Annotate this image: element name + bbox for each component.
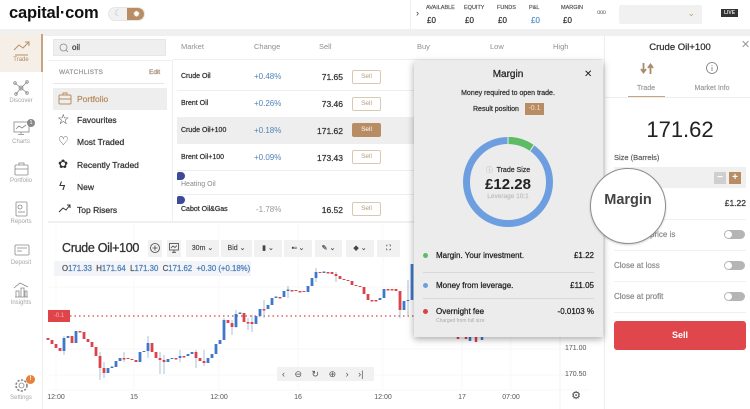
new row: ϟ <box>59 179 65 193</box>
margin popup <box>414 61 603 337</box>
position badge: -0.1 <box>528 105 541 112</box>
reports item: Reports <box>10 219 32 225</box>
margin value: £1.22 <box>725 198 746 208</box>
minus button <box>714 172 726 184</box>
row: Cabot Oil&Gas: 16.52 <box>322 205 343 215</box>
icon: trade <box>14 42 30 56</box>
magnified word: Margin <box>604 192 652 208</box>
candles below popup <box>470 337 482 341</box>
row: Crude Oil: Crude Oil <box>181 73 211 80</box>
layers button: ◆ ⌄ <box>353 245 367 252</box>
draw button <box>315 240 342 257</box>
market info tab <box>694 62 730 92</box>
settings item: Settings <box>10 395 32 401</box>
reports item <box>10 202 32 225</box>
insights item: Insights <box>11 300 31 306</box>
row: Heating Oil <box>177 171 537 195</box>
column headers: Market <box>181 42 204 51</box>
row: Brent Oil+100: +0.09% <box>254 153 281 162</box>
row: close at loss <box>614 251 746 282</box>
indicators button <box>284 240 312 257</box>
bid button <box>221 240 252 257</box>
account summary: FUNDS <box>497 5 516 11</box>
account dropdown <box>619 5 702 24</box>
time axis labels: ⚙ <box>571 390 581 402</box>
row: Heating Oil: Heating Oil <box>181 181 216 188</box>
row: Brent Oil <box>177 91 537 118</box>
column headers <box>173 36 604 60</box>
draw button: ✎ ⌄ <box>322 245 335 252</box>
magnifier callout <box>590 168 666 244</box>
popup close: ✕ <box>584 69 592 80</box>
new row <box>59 179 94 193</box>
position label <box>48 310 70 322</box>
market panel <box>48 36 604 223</box>
price: 171.62 <box>646 117 714 142</box>
panel title: Crude Oil+100 <box>649 42 711 53</box>
search box <box>53 39 166 56</box>
fullscreen button: ⛶ <box>386 245 391 252</box>
size label: Size (Barrels) <box>614 153 659 162</box>
chart navigation: ‹ ⊖ ↻ ⊕ › ›| <box>282 369 363 379</box>
price axis labels: 170.50 <box>565 371 586 378</box>
account summary: £0 <box>498 16 507 25</box>
plus button: + <box>732 172 738 183</box>
candle type button: ▮ ⌄ <box>262 245 274 252</box>
toggle sun <box>127 7 146 21</box>
row: Brent Oil+100 <box>177 144 537 171</box>
bid button: Bid ⌄ <box>228 245 245 252</box>
chart toolbar <box>148 240 181 257</box>
most traded row: Most Traded <box>77 137 124 147</box>
discover item: Discover <box>9 98 33 104</box>
row: close at profit: Close at profit <box>614 292 663 301</box>
donut chart <box>463 137 553 227</box>
legend: margin: Margin. Your investment. <box>436 251 524 260</box>
timeframe button: 30m ⌄ <box>192 245 213 252</box>
column headers: Change <box>254 42 280 51</box>
row: Crude Oil+100 selected: +0.18% <box>254 126 281 135</box>
account summary: £0 <box>465 16 474 25</box>
position label: -0.1 <box>54 313 64 319</box>
popup title: Margin <box>493 69 523 80</box>
legend divider two <box>423 298 594 299</box>
time axis labels: 12:00 <box>374 394 392 401</box>
position badge <box>525 103 544 115</box>
account summary <box>410 0 610 29</box>
settings item: ! <box>30 376 32 382</box>
account summary: › <box>416 8 419 18</box>
trade tab: Trade <box>637 85 655 92</box>
row: Cabot Oil&Gas: Cabot Oil&Gas <box>181 206 228 213</box>
legend: overnight fee: Overnight fee <box>436 307 484 316</box>
trade size value: £12.28 <box>485 176 531 193</box>
price axis labels: 171.00 <box>565 345 586 352</box>
close icon: ✕ <box>741 39 750 51</box>
chart panel <box>48 224 604 409</box>
row: price is: price is <box>650 230 675 239</box>
time axis labels: 16 <box>294 394 302 401</box>
legend: overnight fee: Charged from full size <box>436 318 485 324</box>
chart title: Crude Oil+100 <box>62 241 139 255</box>
recently traded row: Recently Traded <box>77 160 139 170</box>
charts item: 1 <box>29 120 33 126</box>
favourites row <box>57 111 117 127</box>
favourites row: Favourites <box>77 115 117 125</box>
row: Crude Oil+100 selected: 171.62 <box>317 126 343 136</box>
edit link: Edit <box>149 69 160 76</box>
discover item <box>9 80 33 104</box>
sell button: Sell <box>672 330 688 340</box>
most traded row: ♡ <box>58 134 69 148</box>
most traded row <box>58 134 124 148</box>
button: add <box>148 240 162 257</box>
trade size label: ⓘ Trade Size <box>486 167 530 174</box>
row: Brent Oil: Brent Oil <box>181 100 208 107</box>
timeframe button <box>186 240 219 257</box>
legend: margin <box>423 251 594 260</box>
legend: leverage: Money from leverage. <box>436 281 513 290</box>
result position: Result position <box>473 106 519 113</box>
row: Crude Oil+100 selected: Crude Oil+100 <box>181 127 226 134</box>
row: Crude Oil: 71.65 <box>322 72 343 82</box>
deposit item <box>11 244 32 266</box>
portfolio item: Portfolio <box>10 178 32 184</box>
row: Brent Oil: +0.26% <box>254 99 281 108</box>
deposit item: Deposit <box>11 260 31 266</box>
live badge <box>721 9 738 17</box>
fullscreen button <box>377 240 400 257</box>
favourites row: ☆ <box>57 111 70 127</box>
row: Brent Oil+100: 173.43 <box>317 153 343 163</box>
time axis labels: 07:00 <box>502 394 520 401</box>
new row: New <box>77 182 94 192</box>
account dropdown: ⌄ <box>687 8 695 18</box>
legend: leverage: £11.05 <box>570 281 594 290</box>
row: Crude Oil+100 selected <box>177 117 537 144</box>
account summary: EQUITY <box>464 5 484 11</box>
column headers: Sell <box>319 42 332 51</box>
indicators button: ▪▫ ⌄ <box>292 245 304 252</box>
watchlists column <box>48 60 173 223</box>
settings item <box>10 375 35 401</box>
trade tab <box>628 60 665 97</box>
row: Brent Oil: Sell <box>361 100 372 107</box>
toggle sun: ✹ <box>133 9 140 19</box>
legend: overnight fee: -0.0103 % <box>558 307 594 316</box>
time axis labels: 15 <box>130 394 138 401</box>
watchlists underline <box>53 83 164 84</box>
account summary: £0 <box>531 16 540 25</box>
toggle moon: ☾ <box>114 8 122 18</box>
sell button <box>614 321 746 350</box>
icon: trade arrows <box>640 63 654 74</box>
row: Cabot Oil&Gas: -1.78% <box>256 205 281 214</box>
row: Cabot Oil&Gas <box>177 196 381 216</box>
column headers: Buy <box>417 42 430 51</box>
account summary: £0 <box>563 16 572 25</box>
logo: capital·com <box>9 4 98 22</box>
account summary: AVAILABLE <box>426 5 455 11</box>
live badge: LIVE <box>724 10 735 16</box>
red candles <box>48 272 400 373</box>
row: Crude Oil: Sell <box>361 73 372 80</box>
plus button <box>729 172 741 184</box>
row: Brent Oil+100: Brent Oil+100 <box>181 154 224 161</box>
account summary: P&L <box>529 5 539 11</box>
leverage: Leverage 10:1 <box>487 193 529 200</box>
time axis labels: 17 <box>458 394 466 401</box>
time axis labels <box>47 390 581 402</box>
chart navigation <box>277 367 374 381</box>
market info tab: Market Info <box>694 85 730 92</box>
layers button <box>346 240 374 257</box>
portfolio row <box>53 88 167 110</box>
trade label: Trade <box>13 57 29 63</box>
column headers: Low <box>490 42 504 51</box>
time axis labels: 12:00 <box>210 394 228 401</box>
row: close at profit <box>614 282 746 313</box>
size input <box>614 167 746 188</box>
portfolio item <box>10 162 32 184</box>
tab divider <box>605 97 750 98</box>
charts item <box>12 119 35 145</box>
legend: leverage <box>423 281 594 290</box>
minus button: − <box>717 172 723 183</box>
legend divider one <box>423 272 594 273</box>
row: Brent Oil: 73.46 <box>322 99 343 109</box>
markets rows <box>177 70 414 216</box>
row: Cabot Oil&Gas: Sell <box>361 205 372 212</box>
account summary: £0 <box>427 16 436 25</box>
watchlists heading: WATCHLISTS <box>59 69 103 76</box>
row: Crude Oil <box>177 61 537 91</box>
top risers row: Top Risers <box>77 205 117 215</box>
row: Brent Oil+100: Sell <box>361 153 372 160</box>
account summary: MARGIN <box>561 5 583 11</box>
active trade tab <box>0 34 43 72</box>
recently traded row <box>58 157 139 171</box>
candle type button <box>254 240 282 257</box>
top bar <box>0 0 750 29</box>
price axis labels <box>565 345 586 378</box>
blue candles <box>64 264 412 373</box>
top risers row <box>58 204 117 215</box>
time axis labels: 12:00 <box>47 394 65 401</box>
portfolio row: Portfolio <box>77 94 108 104</box>
legend: margin: £1.22 <box>574 251 594 260</box>
row: Crude Oil+100 selected: Sell <box>361 126 372 133</box>
column headers: High <box>553 42 568 51</box>
recently traded row: ✿ <box>58 157 68 171</box>
row: price is <box>614 219 746 251</box>
sidebar <box>0 36 43 409</box>
OHLC bar <box>54 261 251 276</box>
trade panel <box>604 36 750 409</box>
button: monitor <box>167 240 181 257</box>
insights item <box>11 282 32 306</box>
background strip <box>0 29 750 36</box>
OHLC values: O171.33 H171.64 L171.30 C171.62 +0.30 (+0.18%) <box>62 264 250 272</box>
row: Crude Oil: +0.48% <box>254 72 281 81</box>
popup description: Money required to open trade. <box>461 90 555 97</box>
row: close at loss: Close at loss <box>614 261 660 270</box>
theme toggle <box>108 7 145 21</box>
charts item: Charts <box>12 139 30 145</box>
account summary: ooo <box>597 10 606 16</box>
legend: overnight fee <box>423 307 594 324</box>
candle wicks <box>64 268 408 380</box>
search box: oil <box>72 43 80 52</box>
result position <box>473 103 544 115</box>
